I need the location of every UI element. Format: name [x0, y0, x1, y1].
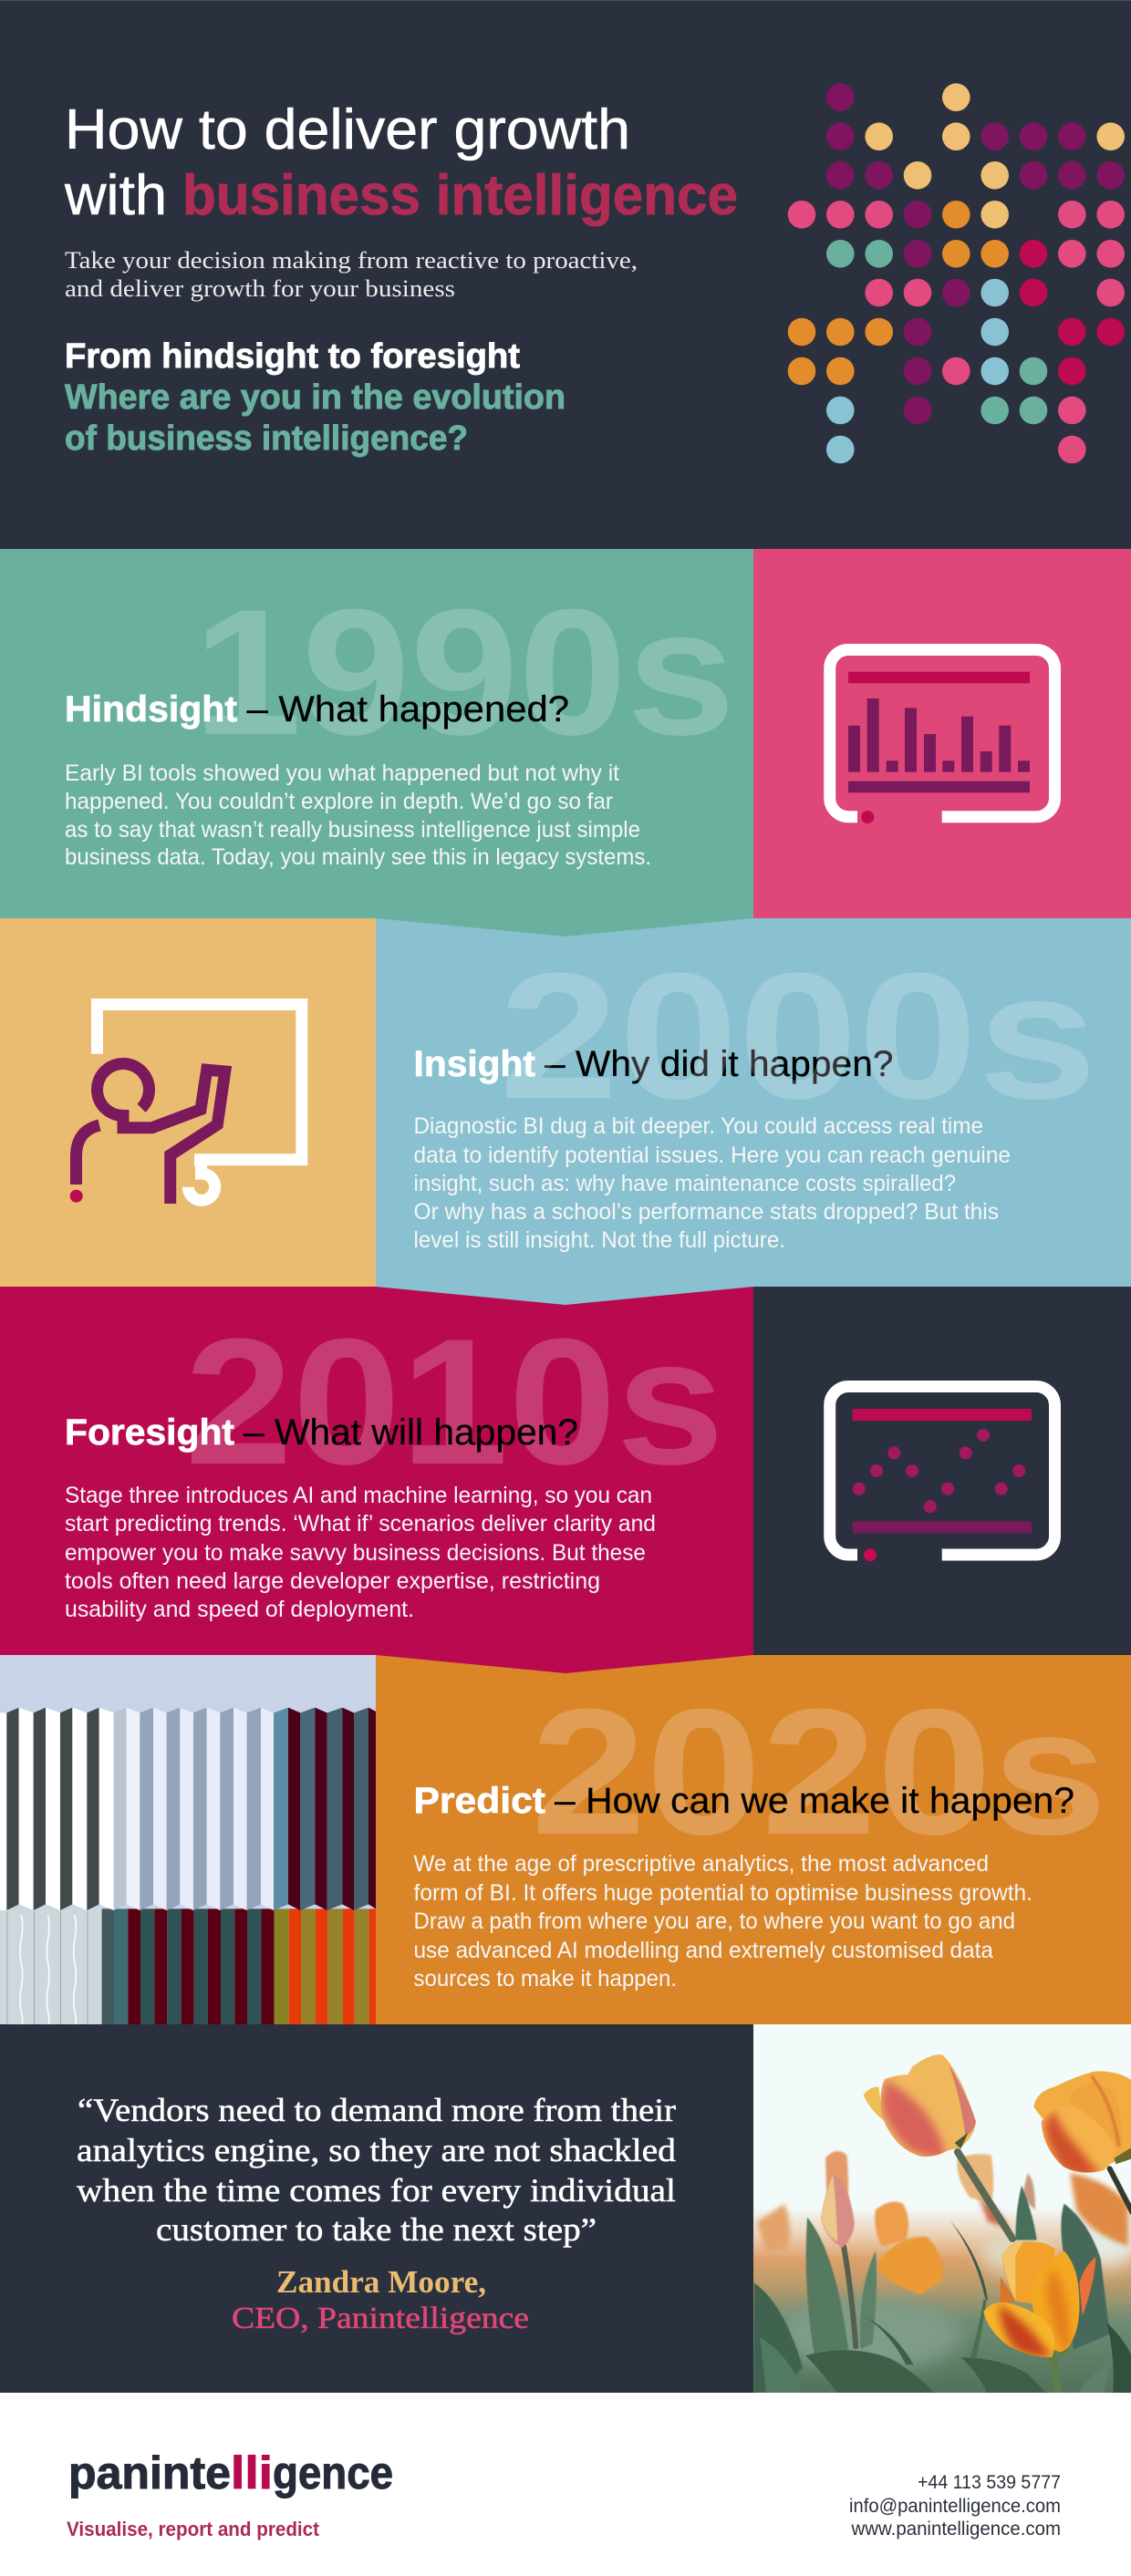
heading: foresight: – What will happen?	[244, 1412, 578, 1453]
quote text	[77, 2092, 676, 2248]
title: with	[64, 164, 167, 227]
logo: panintelligence: lli	[231, 2447, 273, 2498]
panel: 2020s predict	[0, 1655, 1131, 2024]
body text: insight: data to identify potential issues. Here you can reach genuine	[414, 1143, 1011, 1168]
panel: 2000s insight	[0, 918, 1131, 1287]
panel: header	[0, 0, 1131, 549]
title	[64, 98, 738, 227]
subheading	[65, 337, 566, 458]
contact details: www.panintelligence.com	[851, 2519, 1061, 2540]
subtitle: and deliver growth for your business	[65, 275, 455, 302]
heading: predict: – How can we make it happen?	[555, 1781, 1074, 1821]
chevron from blue panel	[376, 1287, 753, 1305]
icon: presenter at whiteboard	[70, 1005, 302, 1204]
heading: hindsight: Hindsight	[65, 689, 237, 729]
chevron from green panel	[376, 918, 753, 936]
body text: insight: Diagnostic BI dug a bit deeper. You could access real time	[414, 1113, 983, 1139]
body text: predict: Draw a path from where you are, to where you want to go and	[414, 1909, 1015, 1934]
body text: insight	[414, 1113, 1011, 1253]
tagline: Visualise, report and predict	[67, 2518, 320, 2540]
quote text: customer to take the next step”	[156, 2211, 597, 2248]
body text: foresight: tools often need large developer expertise, restricting	[65, 1568, 600, 1594]
title: business intelligence	[182, 164, 738, 227]
dot matrix graphic	[788, 83, 1125, 463]
quote attribution	[232, 2264, 529, 2335]
contact details: info@panintelligence.com	[849, 2496, 1061, 2517]
quote text: “Vendors need to demand more from their	[78, 2092, 676, 2128]
contact details: +44 113 539 5777	[918, 2472, 1061, 2493]
body text: hindsight	[65, 760, 651, 870]
photo: tulips	[748, 2015, 1131, 2398]
photo: corrugated building facade	[0, 1655, 379, 2024]
big year 1990s: 1990s	[193, 572, 735, 772]
logo: panintelligence: paninte	[68, 2447, 231, 2498]
big year 2010s: 2010s	[184, 1301, 724, 1502]
leaves	[754, 2186, 1131, 2395]
heading: insight: – Why did it happen?	[545, 1044, 894, 1084]
subheading: of business intelligence?	[65, 419, 468, 458]
heading: predict: Predict	[414, 1781, 545, 1821]
icon: monitor bar chart	[830, 649, 1054, 823]
subheading: From hindsight to foresight	[65, 337, 520, 376]
panel: quote	[0, 2015, 1131, 2398]
subheading: Where are you in the evolution	[65, 378, 566, 417]
panel: 1990s hindsight	[0, 549, 1131, 918]
upper facade band	[0, 1708, 379, 1910]
tulip upper left	[864, 2054, 976, 2158]
body text: predict	[414, 1851, 1032, 1991]
body text: predict: We at the age of prescriptive analytics, the most advanced	[414, 1851, 989, 1877]
tulip front	[983, 2241, 1096, 2357]
body text: predict: use advanced AI modelling and extremely customised data	[414, 1938, 993, 1963]
body text: insight: Or why has a school’s performance stats dropped? But this	[414, 1199, 999, 1225]
body text: hindsight: business data. Today, you mainly see this in legacy systems.	[65, 844, 651, 870]
body text: insight: insight, such as: why have maintenance costs spiralled?	[414, 1171, 956, 1196]
body text: foresight: usability and speed of deployment.	[65, 1597, 414, 1622]
quote attribution: CEO, Panintelligence	[232, 2302, 529, 2335]
tulip upper right	[1033, 2071, 1131, 2177]
bud	[821, 2151, 855, 2248]
tulip stems	[844, 2152, 1131, 2395]
chevron from crimson panel	[376, 1655, 753, 1673]
body text: hindsight: happened. You couldn’t explore in depth. We’d go so far	[65, 789, 613, 814]
big year 2000s: 2000s	[499, 936, 1097, 1136]
body text: foresight: empower you to make savvy business decisions. But these	[65, 1540, 646, 1566]
lower facade band	[0, 1909, 379, 2024]
heading: foresight	[65, 1412, 578, 1453]
panel: 2010s foresight	[0, 1287, 1131, 1655]
heading: hindsight	[65, 689, 569, 729]
heading: insight: Insight	[414, 1044, 535, 1084]
body text: predict: form of BI. It offers huge potential to optimise business growth.	[414, 1880, 1032, 1906]
quote text: when the time comes for every individual	[77, 2172, 676, 2209]
body text: hindsight: Early BI tools showed you what happened but not why it	[65, 760, 619, 786]
body text: insight: level is still insight. Not the full picture.	[414, 1227, 785, 1253]
body text: hindsight: as to say that wasn’t really business intelligence just simple	[65, 817, 640, 843]
logo: panintelligence	[68, 2447, 393, 2498]
title: How to deliver growth	[65, 98, 630, 161]
blurred background field	[753, 2152, 1131, 2393]
heading: hindsight: – What happened?	[246, 689, 569, 729]
icon: monitor scatter plot	[830, 1386, 1054, 1561]
logo: panintelligence: gence	[273, 2447, 393, 2498]
body text: foresight	[65, 1483, 656, 1622]
body text: foresight: Stage three introduces AI and machine learning, so you can	[65, 1483, 652, 1508]
body text: predict: sources to make it happen.	[414, 1966, 677, 1991]
heading: foresight: Foresight	[65, 1412, 234, 1453]
quote text: analytics engine, so they are not shackled	[77, 2132, 676, 2168]
contact details	[849, 2472, 1061, 2540]
panel: footer	[0, 2393, 1131, 2576]
big year 2020s: 2020s	[531, 1671, 1107, 1872]
body text: foresight: start predicting trends. ‘What if’ scenarios deliver clarity and	[65, 1511, 656, 1536]
subtitle	[65, 247, 638, 302]
subtitle: Take your decision making from reactive to proactive,	[65, 247, 638, 274]
quote attribution: Zandra Moore,	[276, 2264, 486, 2300]
